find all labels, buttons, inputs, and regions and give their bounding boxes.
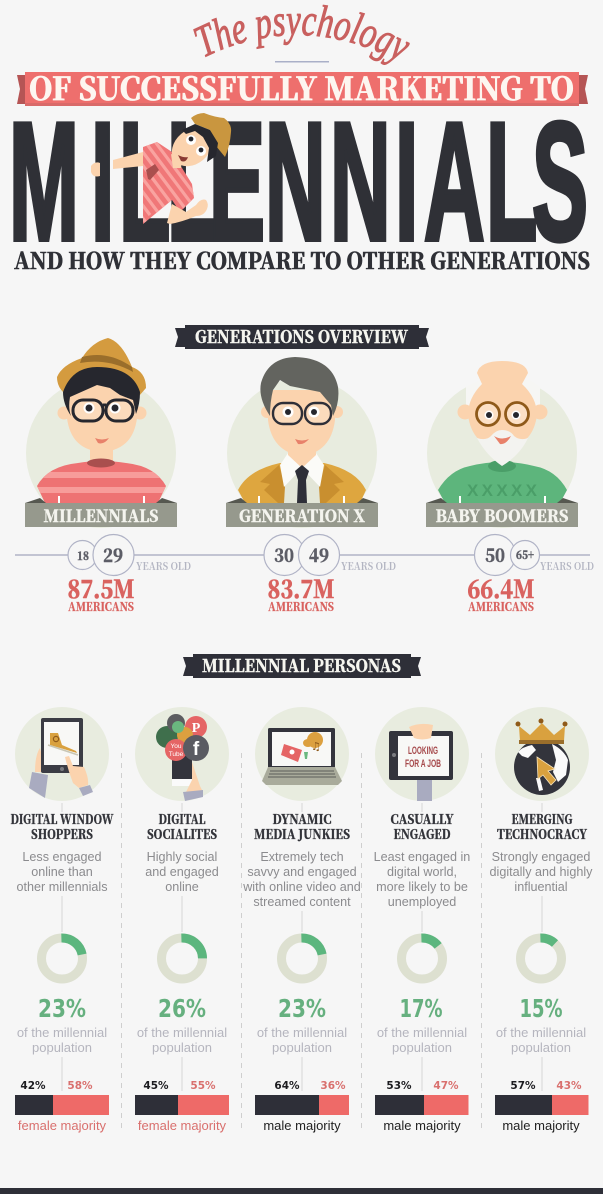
persona: digital socialites xyxy=(135,707,229,1133)
persona description xyxy=(242,850,361,909)
persona name: DIGITAL WINDOW xyxy=(10,809,114,828)
persona description xyxy=(145,850,219,894)
gender bar: 64 male 36 female: 64% xyxy=(274,1080,300,1092)
persona description: Extremely tech xyxy=(260,850,344,864)
age range: 50 to 65+: YEARS OLD xyxy=(540,559,594,574)
population caption: of the millennial xyxy=(137,1025,227,1040)
population caption: population xyxy=(511,1040,571,1055)
panel: baby boomers portrait: XXXXX xyxy=(467,481,538,500)
gender bar: 64 male 36 female: 36% xyxy=(320,1080,346,1092)
icon: looking for a job sign: FOR A JOB xyxy=(405,758,441,770)
stat: millennials population xyxy=(68,570,134,615)
persona: digital socialites: 26% xyxy=(158,994,206,1023)
heading: millennial personas: MILLENNIAL PERSONAS xyxy=(202,653,401,678)
gender bar: 42 male 58 female: 42% xyxy=(20,1080,46,1092)
persona description: with online video and xyxy=(242,880,361,894)
population caption xyxy=(377,1025,467,1055)
population caption: of the millennial xyxy=(257,1025,347,1040)
persona description: savvy and engaged xyxy=(247,865,357,879)
persona: digital window shoppers: SHOPPERS xyxy=(31,824,93,843)
persona name: CASUALLY xyxy=(390,809,454,828)
character face xyxy=(164,120,220,174)
label: generation x: GENERATION X xyxy=(239,502,365,527)
stat: generation x population: AMERICANS xyxy=(268,598,334,615)
panel: baby boomers portrait xyxy=(427,361,577,528)
gender bar: 45 male 55 female: female majority xyxy=(138,1118,227,1133)
donut chart: 15% xyxy=(520,938,562,979)
sweater xyxy=(438,462,567,503)
age range: 30 to 49: YEARS OLD xyxy=(341,559,396,574)
panel: millennials portrait xyxy=(26,338,176,528)
population caption xyxy=(17,1025,107,1055)
neck and collar xyxy=(90,440,113,462)
character right arm and hand xyxy=(167,200,208,224)
sweater xyxy=(37,462,166,503)
heading: generations overview: GENERATIONS OVERVIEW xyxy=(195,324,408,349)
donut chart: 26% xyxy=(162,938,202,979)
persona: digital socialites: SOCIALITES xyxy=(147,824,217,843)
population caption: population xyxy=(32,1040,92,1055)
persona description: digital world, xyxy=(387,865,457,879)
population caption: population xyxy=(152,1040,212,1055)
age range: 50 to 65+ xyxy=(474,534,594,576)
shirt xyxy=(284,470,320,503)
persona: emerging technocracy: 15% xyxy=(520,994,562,1023)
stat: millennials population: AMERICANS xyxy=(68,598,134,615)
age range: 30 to 49: 49 xyxy=(309,541,329,568)
persona description xyxy=(490,850,593,894)
icon: laptop with media: ♫ xyxy=(311,740,321,753)
persona description: digitally and highly xyxy=(490,865,593,879)
gender bar: 64 male 36 female xyxy=(255,1080,349,1133)
title ribbon: of successfully marketing to: OF SUCCESSFULLY MARKETING TO xyxy=(29,65,574,110)
donut chart: 23% xyxy=(42,938,82,979)
footer bar xyxy=(0,1188,603,1194)
gender bar: 64 male 36 female: male majority xyxy=(263,1118,341,1133)
gender bar: 42 male 58 female: 58% xyxy=(67,1080,93,1092)
persona description: online than xyxy=(31,865,93,879)
gender bar: 53 male 47 female xyxy=(375,1080,468,1133)
age range: 18 to 29 xyxy=(68,534,191,576)
character striped shirt xyxy=(143,142,194,224)
gender bar: 57 male 43 female xyxy=(495,1080,588,1133)
tie xyxy=(295,465,309,480)
gender bar: 42 male 58 female: female majority xyxy=(18,1118,107,1133)
character hat xyxy=(191,113,231,157)
persona: emerging technocracy: TECHNOCRACY xyxy=(497,824,588,843)
persona name: DYNAMIC xyxy=(272,809,332,828)
character left arm xyxy=(113,152,143,169)
age range: 50 to 65+: 65+ xyxy=(516,546,534,563)
persona: dynamic media junkies: MEDIA JUNKIES xyxy=(254,824,350,843)
ears xyxy=(58,406,70,420)
gender bar: 42 male 58 female xyxy=(15,1080,109,1133)
gender bar: 45 male 55 female xyxy=(135,1080,229,1133)
gender bar: 57 male 43 female: 43% xyxy=(556,1080,582,1092)
persona description: online xyxy=(165,880,199,894)
character hair xyxy=(182,124,218,162)
panel: generation x portrait xyxy=(227,357,377,528)
persona: dynamic media junkies xyxy=(242,707,361,1133)
hat xyxy=(57,338,146,396)
persona description: Strongly engaged xyxy=(492,850,590,864)
persona: dynamic media junkies: 23% xyxy=(278,994,326,1023)
icon: phone with social media bubbles: Tube xyxy=(169,751,184,758)
character neck xyxy=(171,154,182,168)
icon: phone with social media bubbles: P xyxy=(192,721,201,736)
icon: phone with social media bubbles: You xyxy=(171,743,182,750)
donut chart: 23% xyxy=(282,938,322,979)
jacket xyxy=(238,463,366,503)
gender bar: 53 male 47 female: 47% xyxy=(433,1080,459,1092)
stat: baby boomers population xyxy=(468,570,534,615)
population caption: population xyxy=(272,1040,332,1055)
icon: tablet with shoe xyxy=(15,707,109,801)
persona description: more likely to be xyxy=(376,880,468,894)
persona description xyxy=(374,850,470,909)
icon: phone with social media bubbles xyxy=(135,707,229,801)
head xyxy=(468,361,537,450)
stat: millennials population: 87.5M xyxy=(68,570,134,606)
hair xyxy=(63,367,140,416)
gender bar: 57 male 43 female: 57% xyxy=(510,1080,536,1092)
age range: 30 to 49 xyxy=(264,534,396,576)
population caption xyxy=(496,1025,586,1055)
hair sides xyxy=(466,380,540,412)
beard xyxy=(477,430,528,466)
population caption: of the millennial xyxy=(496,1025,586,1040)
persona: casually engaged: 17% xyxy=(400,994,442,1023)
hair xyxy=(260,357,338,416)
population caption: of the millennial xyxy=(377,1025,467,1040)
persona: digital window shoppers: 23% xyxy=(38,994,86,1023)
title: millennials large word: MILLENNIALS xyxy=(9,89,588,276)
icon: looking for a job sign xyxy=(375,707,469,801)
label: millennials: MILLENNIALS xyxy=(44,502,158,527)
neck and face xyxy=(268,390,335,456)
stat: generation x population xyxy=(268,570,334,615)
persona description: other millennials xyxy=(16,880,108,894)
age range: 50 to 65+: 50 xyxy=(485,541,505,568)
persona description: Less engaged xyxy=(22,850,102,864)
persona description xyxy=(16,850,108,894)
gender bar: 53 male 47 female: male majority xyxy=(383,1118,461,1133)
age range: 18 to 29: 18 xyxy=(77,547,89,564)
gender bar: 45 male 55 female: 45% xyxy=(143,1080,169,1092)
gender bar: 45 male 55 female: 55% xyxy=(190,1080,216,1092)
persona: casually engaged: ENGAGED xyxy=(394,824,450,843)
population caption: population xyxy=(392,1040,452,1055)
persona description: streamed content xyxy=(253,895,351,909)
gender bar: 57 male 43 female: male majority xyxy=(502,1118,580,1133)
icon: laptop with media xyxy=(255,707,349,801)
persona description: Highly social xyxy=(147,850,217,864)
persona: emerging technocracy xyxy=(490,707,593,1133)
icon: phone with social media bubbles: f xyxy=(193,739,200,760)
age range: 30 to 49: 30 xyxy=(274,541,294,568)
stat: baby boomers population: 66.4M xyxy=(468,570,534,606)
stat: generation x population: 83.7M xyxy=(268,570,334,606)
ears xyxy=(261,406,273,418)
persona: casually engaged xyxy=(374,707,470,1133)
persona description: and engaged xyxy=(145,865,219,879)
donut chart: 17% xyxy=(402,938,442,979)
character left hand xyxy=(91,162,100,176)
stat: baby boomers population: AMERICANS xyxy=(468,598,534,615)
persona description: influential xyxy=(514,880,568,894)
character peeking through the title xyxy=(91,113,232,224)
age range: 18 to 29: 29 xyxy=(103,541,123,568)
glasses xyxy=(73,400,133,421)
population caption xyxy=(257,1025,347,1055)
age timeline xyxy=(15,534,594,576)
face xyxy=(67,385,137,452)
age range: 18 to 29: YEARS OLD xyxy=(136,559,191,574)
persona: digital window shoppers xyxy=(10,707,114,1133)
persona name: DIGITAL xyxy=(158,809,206,828)
label: baby boomers: BABY BOOMERS xyxy=(436,502,568,527)
persona name: EMERGING xyxy=(512,809,573,828)
persona description: unemployed xyxy=(388,895,456,909)
icon: looking for a job sign: LOOKING xyxy=(408,745,438,757)
gender bar: 53 male 47 female: 53% xyxy=(386,1080,412,1092)
persona description: Least engaged in xyxy=(374,850,470,864)
population caption xyxy=(137,1025,227,1055)
glasses xyxy=(476,402,528,426)
population caption: of the millennial xyxy=(17,1025,107,1040)
glasses xyxy=(273,403,331,424)
ears xyxy=(458,404,472,420)
icon: crowned globe with cursor xyxy=(495,707,589,801)
